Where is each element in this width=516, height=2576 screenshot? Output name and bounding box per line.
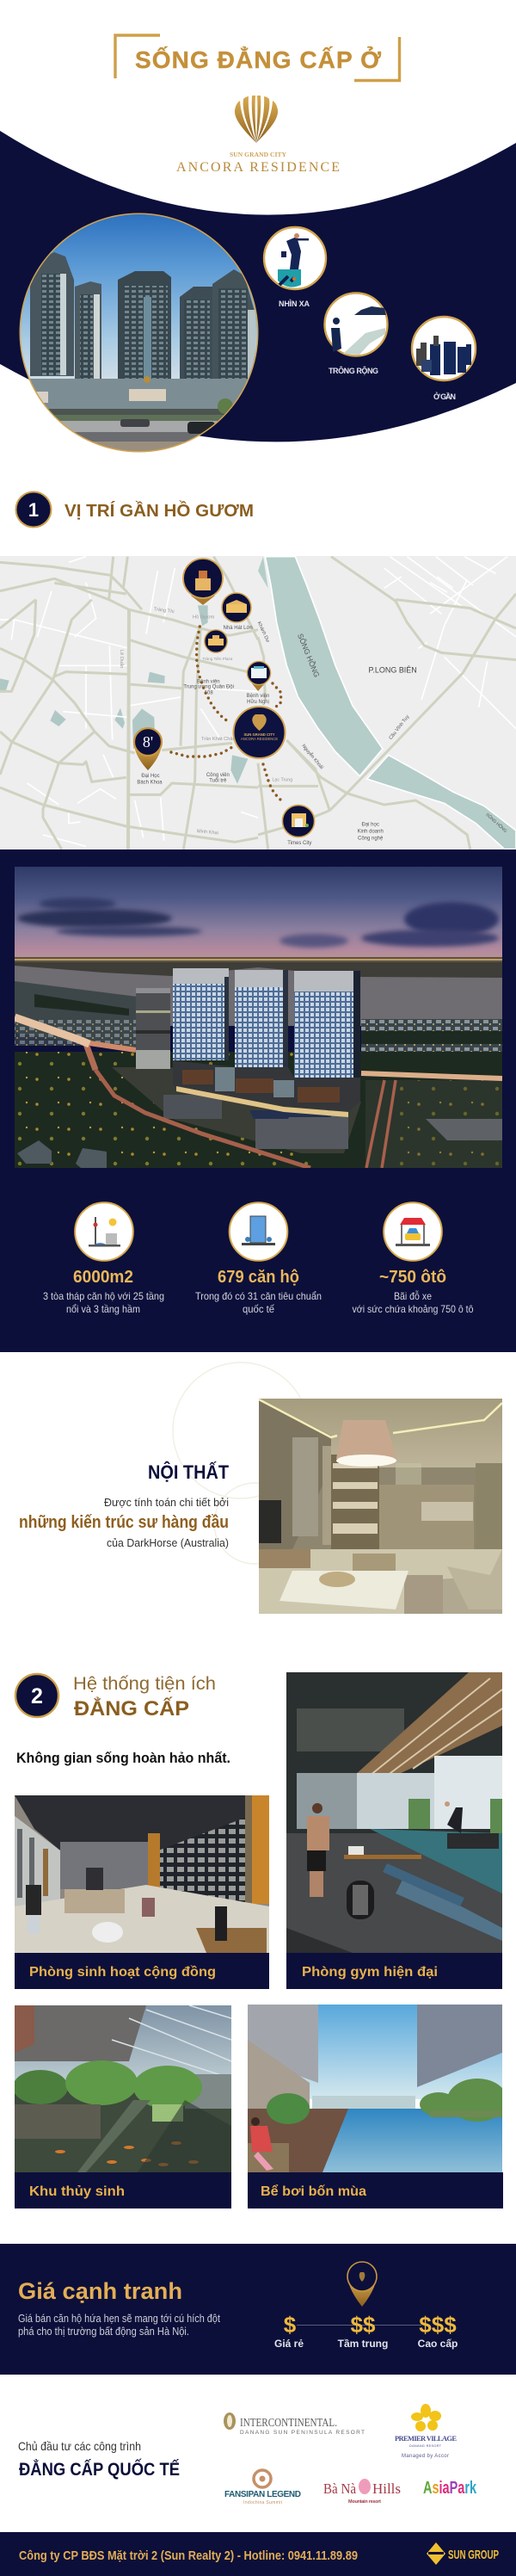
heading: section 1	[15, 492, 254, 527]
footer	[0, 2532, 516, 2576]
stat: 750 ô tô	[353, 1202, 474, 1315]
logo: Bà Nà Hills	[323, 2479, 401, 2505]
office tower	[136, 993, 170, 1050]
card: aquatic garden	[13, 2005, 231, 2208]
map: left half: Công viên	[206, 773, 230, 778]
tower 1	[173, 968, 229, 984]
label: nhìn xa: NHÌN XA	[279, 300, 310, 308]
map: right half: P.LONG BIÊN	[369, 665, 417, 674]
logo: Sun Group	[427, 2542, 499, 2565]
navy curved band	[0, 131, 516, 442]
badge: number 1	[15, 492, 52, 527]
stat: 679 căn hộ: Trong đó có 31 căn tiêu chuẩn	[195, 1290, 322, 1302]
icon: ở gần	[412, 317, 476, 380]
pin: 8 phút: 8'	[143, 733, 153, 751]
photo: living room	[259, 1399, 502, 1614]
logo: Asia Park: AsiaPark	[423, 2479, 477, 2498]
map: right half: Công nghệ	[358, 836, 384, 841]
section title: ĐẲNG CẤP	[74, 1696, 189, 1720]
pin: Nhà Hát Lớn	[222, 593, 251, 622]
logo: InterContinental: DANANG SUN PENINSULA RESORT	[240, 2430, 365, 2436]
panel: interior	[19, 1362, 502, 1614]
title frame and heading	[115, 35, 399, 81]
map: right half: Times City	[287, 841, 311, 846]
stat: 679 căn hộ	[195, 1202, 322, 1315]
label: ở gần: Ở GẦN	[433, 392, 456, 401]
map: right half	[256, 557, 516, 849]
text: developer heading: Chủ đầu tư các công trình	[18, 2439, 141, 2453]
text: subtitle: Không gian sống hoàn hảo nhất.	[16, 1750, 230, 1766]
pin: Tràng Tiền Plaza	[205, 630, 227, 652]
title frame and heading: SỐNG ĐẲNG CẤP Ở	[135, 46, 381, 73]
price scale: Giá rẻ	[274, 2338, 304, 2350]
section title	[73, 1674, 216, 1720]
stat: 750 ô tô: với sức chứa khoảng 750 ô tô	[353, 1303, 474, 1315]
map: left half: Đại Học	[141, 774, 160, 779]
photo: night aerial	[15, 867, 502, 1168]
pin: Sun Grand City Ancora: ANCORA RESIDENCE	[241, 737, 278, 741]
logo: Fansipan Legend: Indochina Summit	[243, 2500, 283, 2505]
map: left half: Bách Khoa	[137, 780, 163, 785]
map: left half: Trần Khát Chân	[201, 737, 236, 742]
pin: Times City	[282, 805, 315, 837]
logo: Bà Nà Hills: Bà Nà	[323, 2480, 356, 2497]
map: left half: Bệnh viện	[197, 679, 220, 684]
logo: Ancora Residence	[176, 96, 340, 175]
caption bar	[15, 2172, 231, 2208]
badge: number 2: 2	[31, 1684, 43, 1708]
pin: Bệnh viện Hữu Nghị: Hữu Nghị	[247, 700, 269, 705]
text: developer heading	[18, 2439, 180, 2480]
panel: competitive price	[0, 2244, 516, 2375]
price scale: $	[284, 2312, 297, 2338]
text: price description	[18, 2312, 220, 2338]
card: community room	[15, 1795, 269, 1989]
right lower	[366, 1080, 502, 1168]
podium	[173, 1060, 360, 1112]
section title: VỊ TRÍ GẦN HỒ GƯƠM	[64, 500, 254, 521]
panel: project overview	[0, 849, 516, 1352]
logo: Ancora Residence: SUN GRAND CITY	[230, 151, 287, 158]
stat: 750 ô tô: Bãi đỗ xe	[394, 1289, 432, 1302]
photo: building in gold circle	[17, 211, 262, 454]
pin: Sun Grand City Ancora: SUN GRAND CITY	[243, 732, 275, 737]
stat: 6000m2: 3 tòa tháp căn hộ với 25 tầng	[43, 1290, 164, 1302]
logo: InterContinental	[224, 2412, 365, 2436]
logo: Premier Village	[395, 2404, 457, 2459]
stat: 679 căn hộ: quốc tế	[243, 1303, 274, 1315]
map: left half: Hồ Gươm	[193, 615, 215, 620]
logo: Premier Village: PREMIER VILLAGE	[395, 2434, 457, 2443]
text: company and hotline: Công ty CP BĐS Mặt trời 2 (Sun Realty 2) - Hotline: 0941.11.89.89	[19, 2548, 358, 2563]
map: left half: Tràng Thi	[153, 607, 175, 615]
map: right half: Kinh doanh	[358, 829, 384, 834]
map: route dots	[171, 627, 281, 800]
logo: Bà Nà Hills: Hills	[372, 2480, 401, 2497]
stat: 679 căn hộ: 679 căn hộ	[218, 1268, 299, 1287]
map: right half: Khánh Dư	[256, 621, 270, 644]
text: price description: phá cho thị trường bất động sản Hà Nội.	[18, 2325, 189, 2338]
low-rise cluster	[112, 1067, 361, 1153]
tower 2	[235, 970, 288, 987]
text: interior description: những kiến trúc sư hàng đầu	[19, 1513, 229, 1532]
logo: Fansipan Legend: FANSIPAN LEGEND	[224, 2490, 301, 2499]
text: developer heading: ĐẲNG CẤP QUỐC TẾ	[19, 2459, 180, 2480]
caption bar: Bể bơi bốn mùa	[261, 2184, 366, 2199]
label: trông rộng: TRÔNG RỘNG	[329, 366, 378, 375]
text: price description: Giá bán căn hộ hứa hẹn sẽ mang tới cú hích đột	[18, 2312, 220, 2325]
map: right half: Cầu Vĩnh Tuy	[389, 714, 411, 741]
text: interior description	[19, 1496, 229, 1549]
section title: Hệ thống tiện ích	[73, 1674, 216, 1694]
price scale: $$	[351, 2312, 376, 2338]
caption bar	[286, 1953, 502, 1989]
pin: Hồ Gươm	[183, 559, 223, 605]
caption bar	[15, 1953, 269, 1989]
card: gym	[286, 1672, 502, 1989]
map: left half	[0, 557, 258, 849]
map: right half: SÔNG HỒNG	[296, 632, 322, 679]
caption bar: Phòng gym hiện đại	[302, 1965, 438, 1980]
map: left half: 108	[205, 691, 213, 696]
map: left half: Tràng Tiền Plaza	[202, 657, 233, 661]
stat: 6000m2: nổi và 3 tầng hầm	[66, 1303, 140, 1315]
caption bar: Khu thủy sinh	[29, 2184, 125, 2199]
left town	[15, 981, 138, 1052]
price scale	[274, 2312, 458, 2350]
card: pool	[248, 2005, 507, 2208]
logo: Premier Village: Managed by Accor	[402, 2454, 449, 2459]
price scale: Cao cấp	[418, 2338, 458, 2350]
pin: Sun Grand City Ancora	[234, 707, 286, 758]
roads	[89, 1043, 136, 1050]
right town	[361, 1019, 502, 1052]
heading: giá cạnh tranh: Giá cạnh tranh	[18, 2278, 182, 2304]
stat: 6000m2	[43, 1202, 164, 1315]
heading: section 2	[15, 1674, 216, 1720]
pin: 8 phút	[134, 728, 162, 770]
logo: Fansipan Legend	[224, 2470, 301, 2505]
text: interior description: của DarkHorse (Australia)	[107, 1536, 229, 1549]
map: left half: Minh Khai	[197, 829, 218, 836]
map: right half: Nguyễn Khoái	[300, 743, 325, 770]
icon: location pin	[347, 2262, 377, 2307]
icon: apartment block	[230, 1202, 287, 1261]
icon: car park	[384, 1202, 442, 1261]
caption bar	[248, 2172, 503, 2208]
map: left half: Trung ương Quân Đội	[183, 685, 234, 690]
panel: international developer	[18, 2404, 477, 2505]
pin: Bệnh viện Hữu Nghị	[247, 661, 271, 705]
map	[0, 556, 516, 849]
stat: 750 ô tô: ~750 ôtô	[379, 1268, 446, 1287]
stat: 6000m2: 6000m2	[73, 1268, 133, 1287]
dark trees	[15, 1052, 502, 1168]
logo: InterContinental: INTERCONTINENTAL.	[240, 2417, 337, 2430]
map: right half: Lạc Trung	[272, 778, 292, 783]
map: left half: Lê Duẩn	[119, 650, 125, 668]
map: left half: Nhà Hát Lớn	[224, 626, 253, 631]
price scale: Tầm trung	[338, 2338, 388, 2350]
icon: trông rộng	[325, 293, 387, 356]
tower 3	[294, 971, 353, 991]
badge: number 1: 1	[28, 499, 39, 521]
price scale: $$$	[419, 2312, 457, 2338]
heading: nội thất: NỘI THẤT	[148, 1461, 229, 1483]
map: right half: Đại học	[362, 822, 379, 827]
text: interior description: Được tính toán chi tiết bởi	[104, 1496, 229, 1509]
map: right half: SÔNG HỒNG	[484, 812, 508, 834]
icon: land area	[75, 1202, 133, 1261]
map: left half: Tuổi trẻ	[209, 778, 227, 784]
panel: hero	[0, 35, 516, 454]
logo: Ancora Residence: ANCORA RESIDENCE	[176, 160, 340, 175]
icon: nhìn xa	[264, 227, 326, 289]
pin: Bệnh viện Hữu Nghị: Bệnh viện	[247, 694, 269, 699]
badge: number 2	[15, 1674, 58, 1717]
caption bar: Phòng sinh hoạt cộng đồng	[29, 1965, 216, 1980]
logo: Bà Nà Hills: Mountain resort	[348, 2499, 381, 2505]
logo: Premier Village: DANANG RESORT	[409, 2444, 442, 2448]
